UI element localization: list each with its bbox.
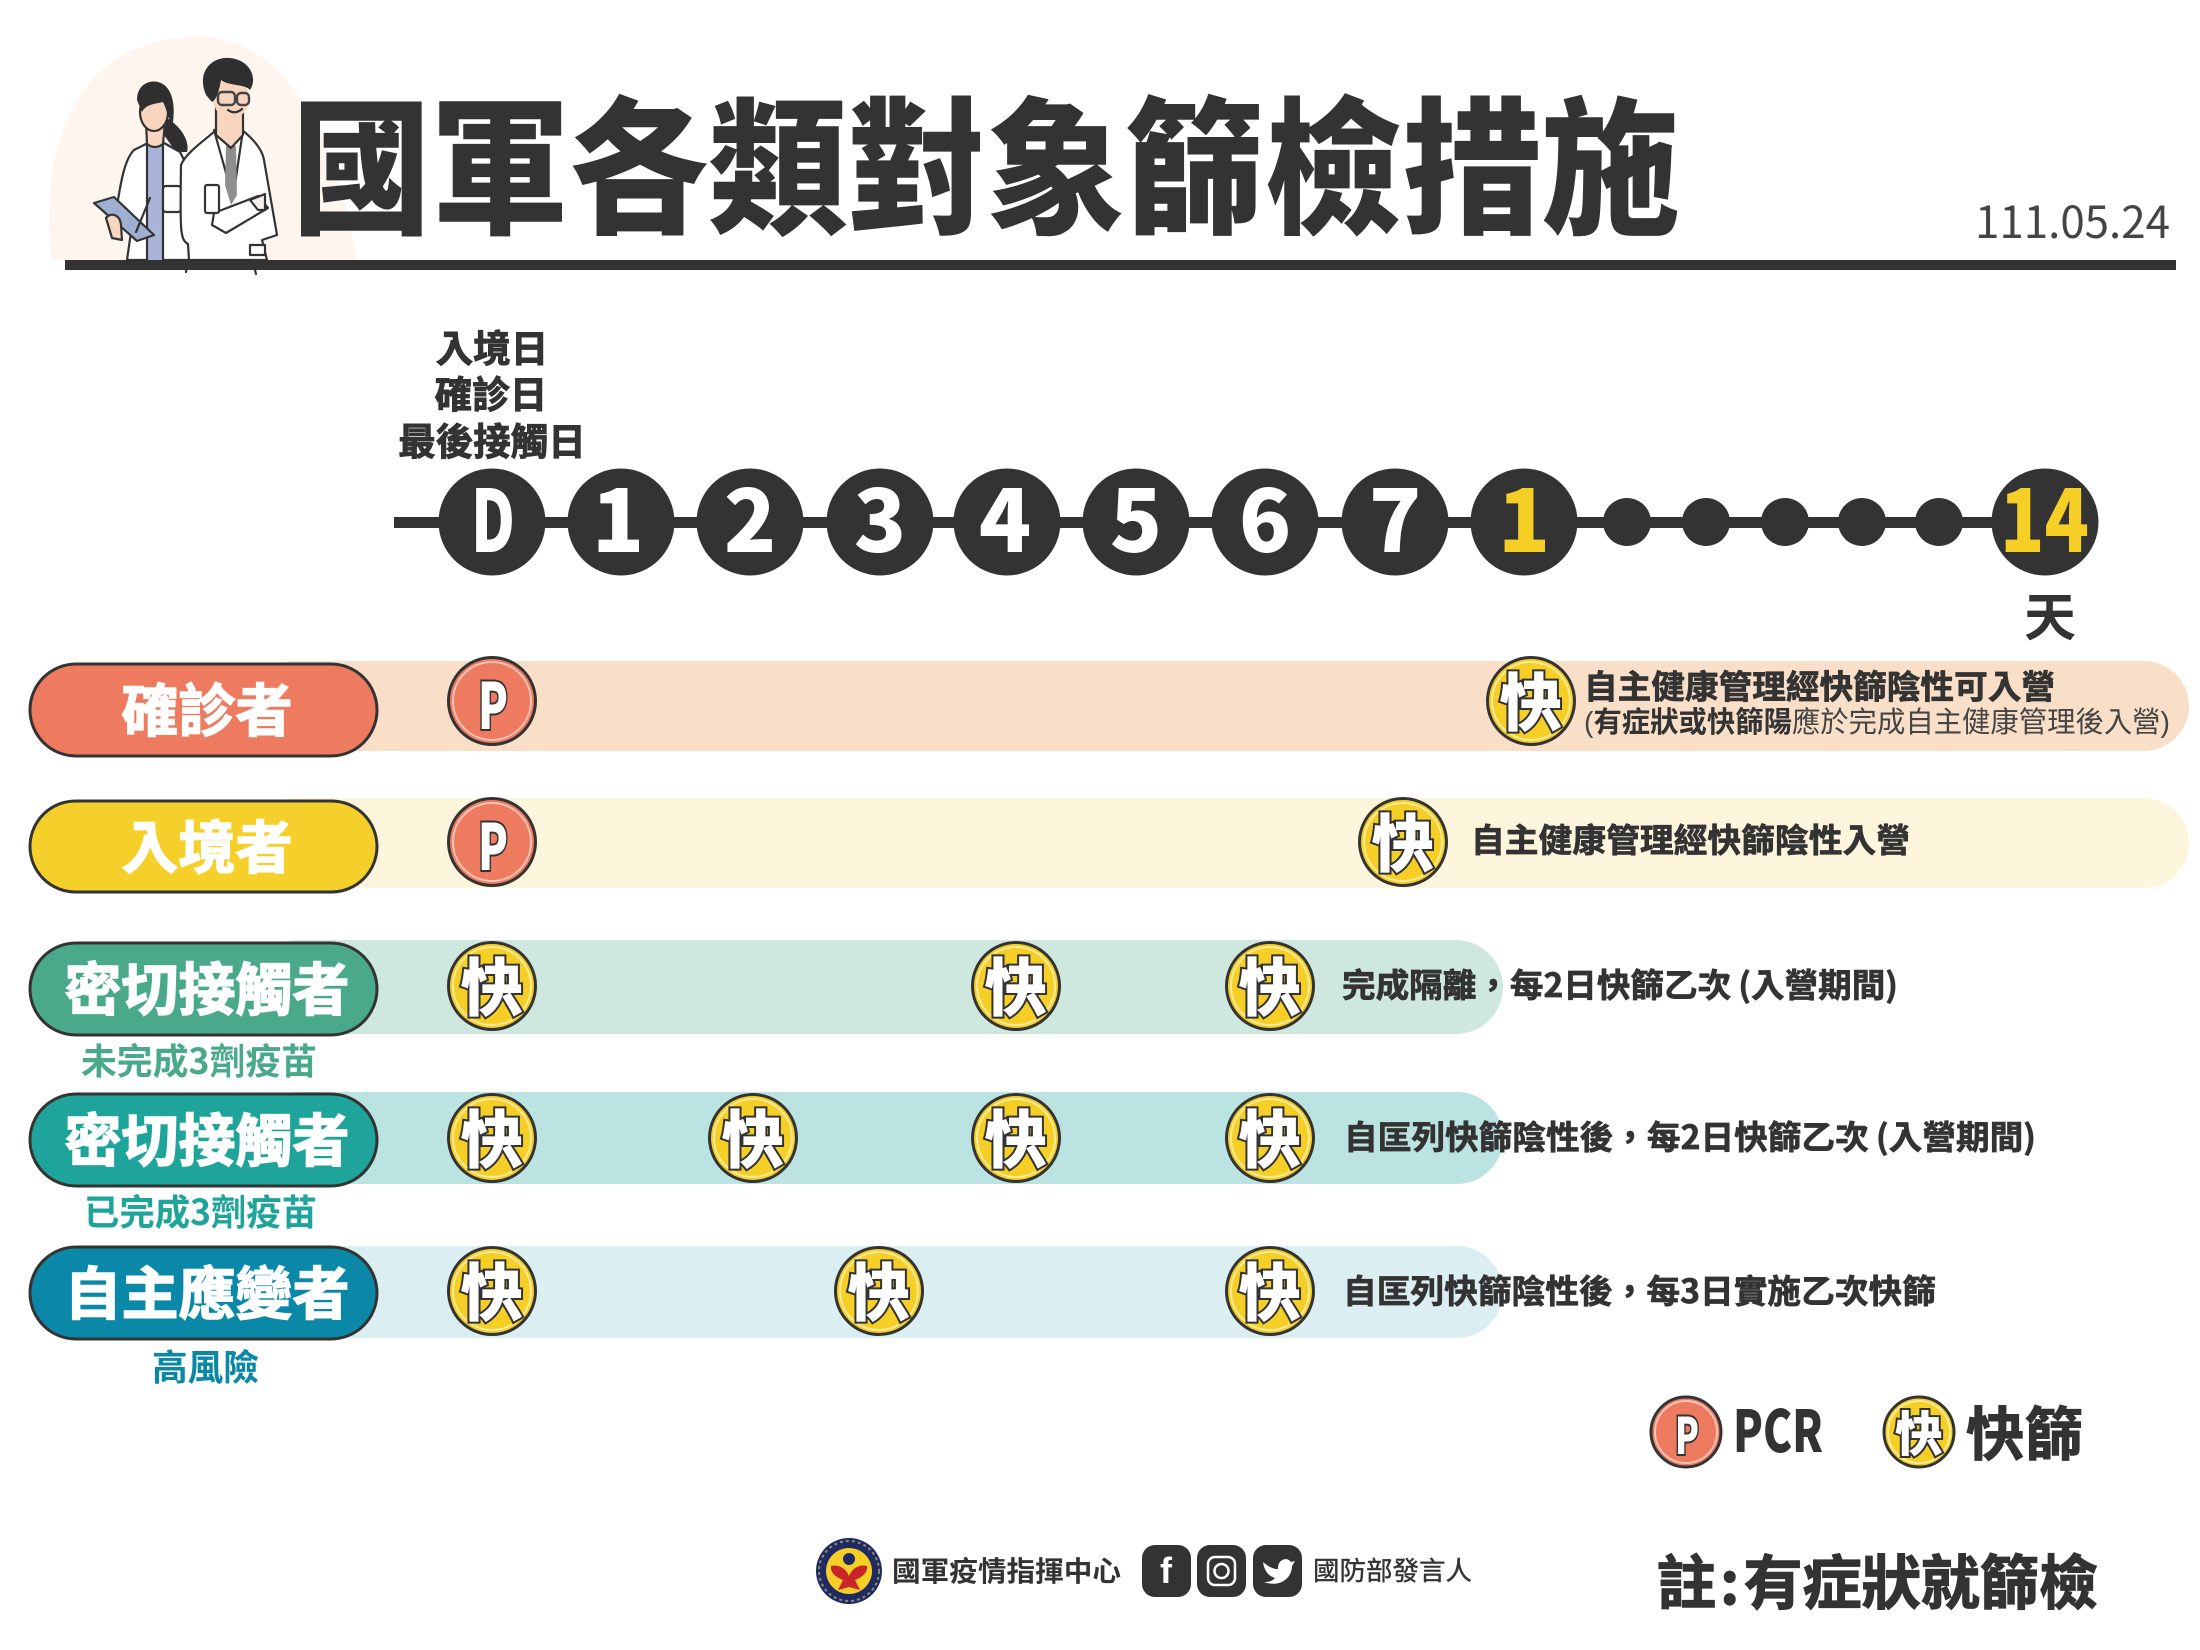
- instruction text: 完成隔離，每2日快篩乙次 (入營期間): [1342, 959, 1898, 1007]
- rapid test badge: 快: [848, 1244, 910, 1334]
- day 5: [1082, 452, 1190, 577]
- sub label: 已完成3劑疫苗: [84, 1184, 317, 1236]
- row: self-response, high risk: [30, 1244, 1936, 1391]
- footer: social media icons and spokesperson: [1142, 1545, 1472, 1597]
- day 4: [954, 452, 1060, 577]
- timeline day labels: 入境日: [436, 328, 548, 370]
- instruction text: 自匡列快篩陰性後，每2日快篩乙次 (入營期間): [1344, 1111, 2036, 1159]
- rapid test badge: 快: [460, 1244, 524, 1334]
- rapid test badge: 快: [1238, 1244, 1302, 1334]
- row: inbound arrivals: [30, 794, 2189, 892]
- day 7: 7: [1369, 452, 1421, 577]
- footer: command center emblem and name: 國軍疫情指揮中心: [892, 1550, 1121, 1590]
- timeline day labels: 最後接觸日: [398, 421, 586, 463]
- male doctor: [181, 58, 277, 274]
- day 4: 4: [979, 452, 1031, 577]
- date: 111.05.24: [1975, 187, 2170, 251]
- day 3: [826, 452, 934, 577]
- note: 註:有症狀就篩檢: [1657, 1536, 2098, 1621]
- rapid test badge: 快: [1372, 794, 1434, 886]
- sub label: 未完成3劑疫苗: [81, 1033, 317, 1085]
- instruction text: (有症狀或快篩陽應於完成自主健康管理後入營): [1584, 706, 2170, 739]
- row: close contacts, three doses: [30, 1090, 2036, 1236]
- title: 國軍各類對象篩檢措施: [292, 50, 1680, 265]
- footer: command center emblem and name: [816, 1538, 1121, 1604]
- pill label: [30, 664, 377, 756]
- PCR badge: [448, 656, 536, 748]
- day 1: [568, 452, 674, 577]
- day D: D: [471, 452, 515, 577]
- rapid test badge: 快: [984, 938, 1048, 1030]
- legend: rapid test: 快篩: [1966, 1388, 2083, 1472]
- day 2: [696, 452, 804, 577]
- day 7: [1342, 452, 1448, 577]
- icon: facebook: [1142, 1545, 1191, 1597]
- icon: instagram: [1197, 1545, 1246, 1597]
- instruction text: [1584, 668, 2170, 739]
- legend: PCR: PCR: [1733, 1385, 1823, 1469]
- legend: rapid test: [1884, 1388, 2083, 1472]
- day 1: 1: [592, 452, 644, 577]
- PCR badge: P: [478, 797, 508, 889]
- rapid test badge: 快: [1500, 654, 1562, 744]
- row: close contacts, under three doses: [30, 938, 1898, 1085]
- legend: [1651, 1385, 2083, 1472]
- unit label: days: 天: [2024, 576, 2076, 651]
- icon: emblem: [816, 1538, 882, 1604]
- pill label: 密切接觸者: [64, 945, 350, 1027]
- female doctor: [94, 82, 190, 260]
- pill label: 密切接觸者: [64, 1096, 350, 1178]
- day 6: 6: [1239, 452, 1291, 577]
- footer: social media icons and spokesperson: 國防部發言人: [1313, 1551, 1472, 1588]
- self health management day 1: 1: [1498, 452, 1550, 577]
- day 3: 3: [854, 452, 906, 577]
- PCR badge: P: [478, 656, 508, 748]
- timeline day labels: [398, 328, 586, 463]
- pill label: 自主應變者: [64, 1249, 350, 1331]
- day 6: [1212, 452, 1318, 577]
- icon: facebook: f: [1160, 1550, 1173, 1591]
- instruction text: 自匡列快篩陰性後，每3日實施乙次快篩: [1343, 1265, 1936, 1313]
- timeline day labels: 確診日: [435, 374, 547, 416]
- day 2: 2: [724, 452, 776, 577]
- sub label: 高風險: [152, 1339, 259, 1391]
- pill label: [30, 801, 377, 892]
- instruction text: 自主健康管理經快篩陰性入營: [1471, 814, 1910, 862]
- self health management day 1: [1470, 452, 1578, 577]
- pill label: 確診者: [122, 666, 292, 748]
- rapid test badge: 快: [460, 1090, 524, 1182]
- rapid test badge: 快: [984, 1090, 1048, 1182]
- PCR badge: [448, 797, 536, 889]
- rapid test badge: 快: [1238, 1090, 1302, 1182]
- row: confirmed cases: [30, 654, 2189, 756]
- icon: peach backdrop and two doctors: [49, 37, 357, 274]
- legend: rapid test: 快: [1895, 1395, 1943, 1465]
- rapid test badge: 快: [1238, 938, 1302, 1030]
- instruction text: 自主健康管理經快篩陰性可入營: [1584, 668, 2055, 706]
- rapid test badge: 快: [722, 1090, 784, 1182]
- timeline axis with day markers: [394, 452, 2098, 577]
- self health management day 14: 14: [2000, 452, 2089, 577]
- legend: PCR: [1651, 1385, 1823, 1469]
- day 5: 5: [1110, 452, 1162, 577]
- icon: twitter: [1253, 1545, 1302, 1597]
- legend: PCR: P: [1675, 1397, 1699, 1469]
- intermediate day dots: [1603, 498, 1963, 546]
- pill label: 入境者: [122, 803, 292, 885]
- rapid test badge: 快: [460, 938, 524, 1030]
- day D: [438, 452, 546, 577]
